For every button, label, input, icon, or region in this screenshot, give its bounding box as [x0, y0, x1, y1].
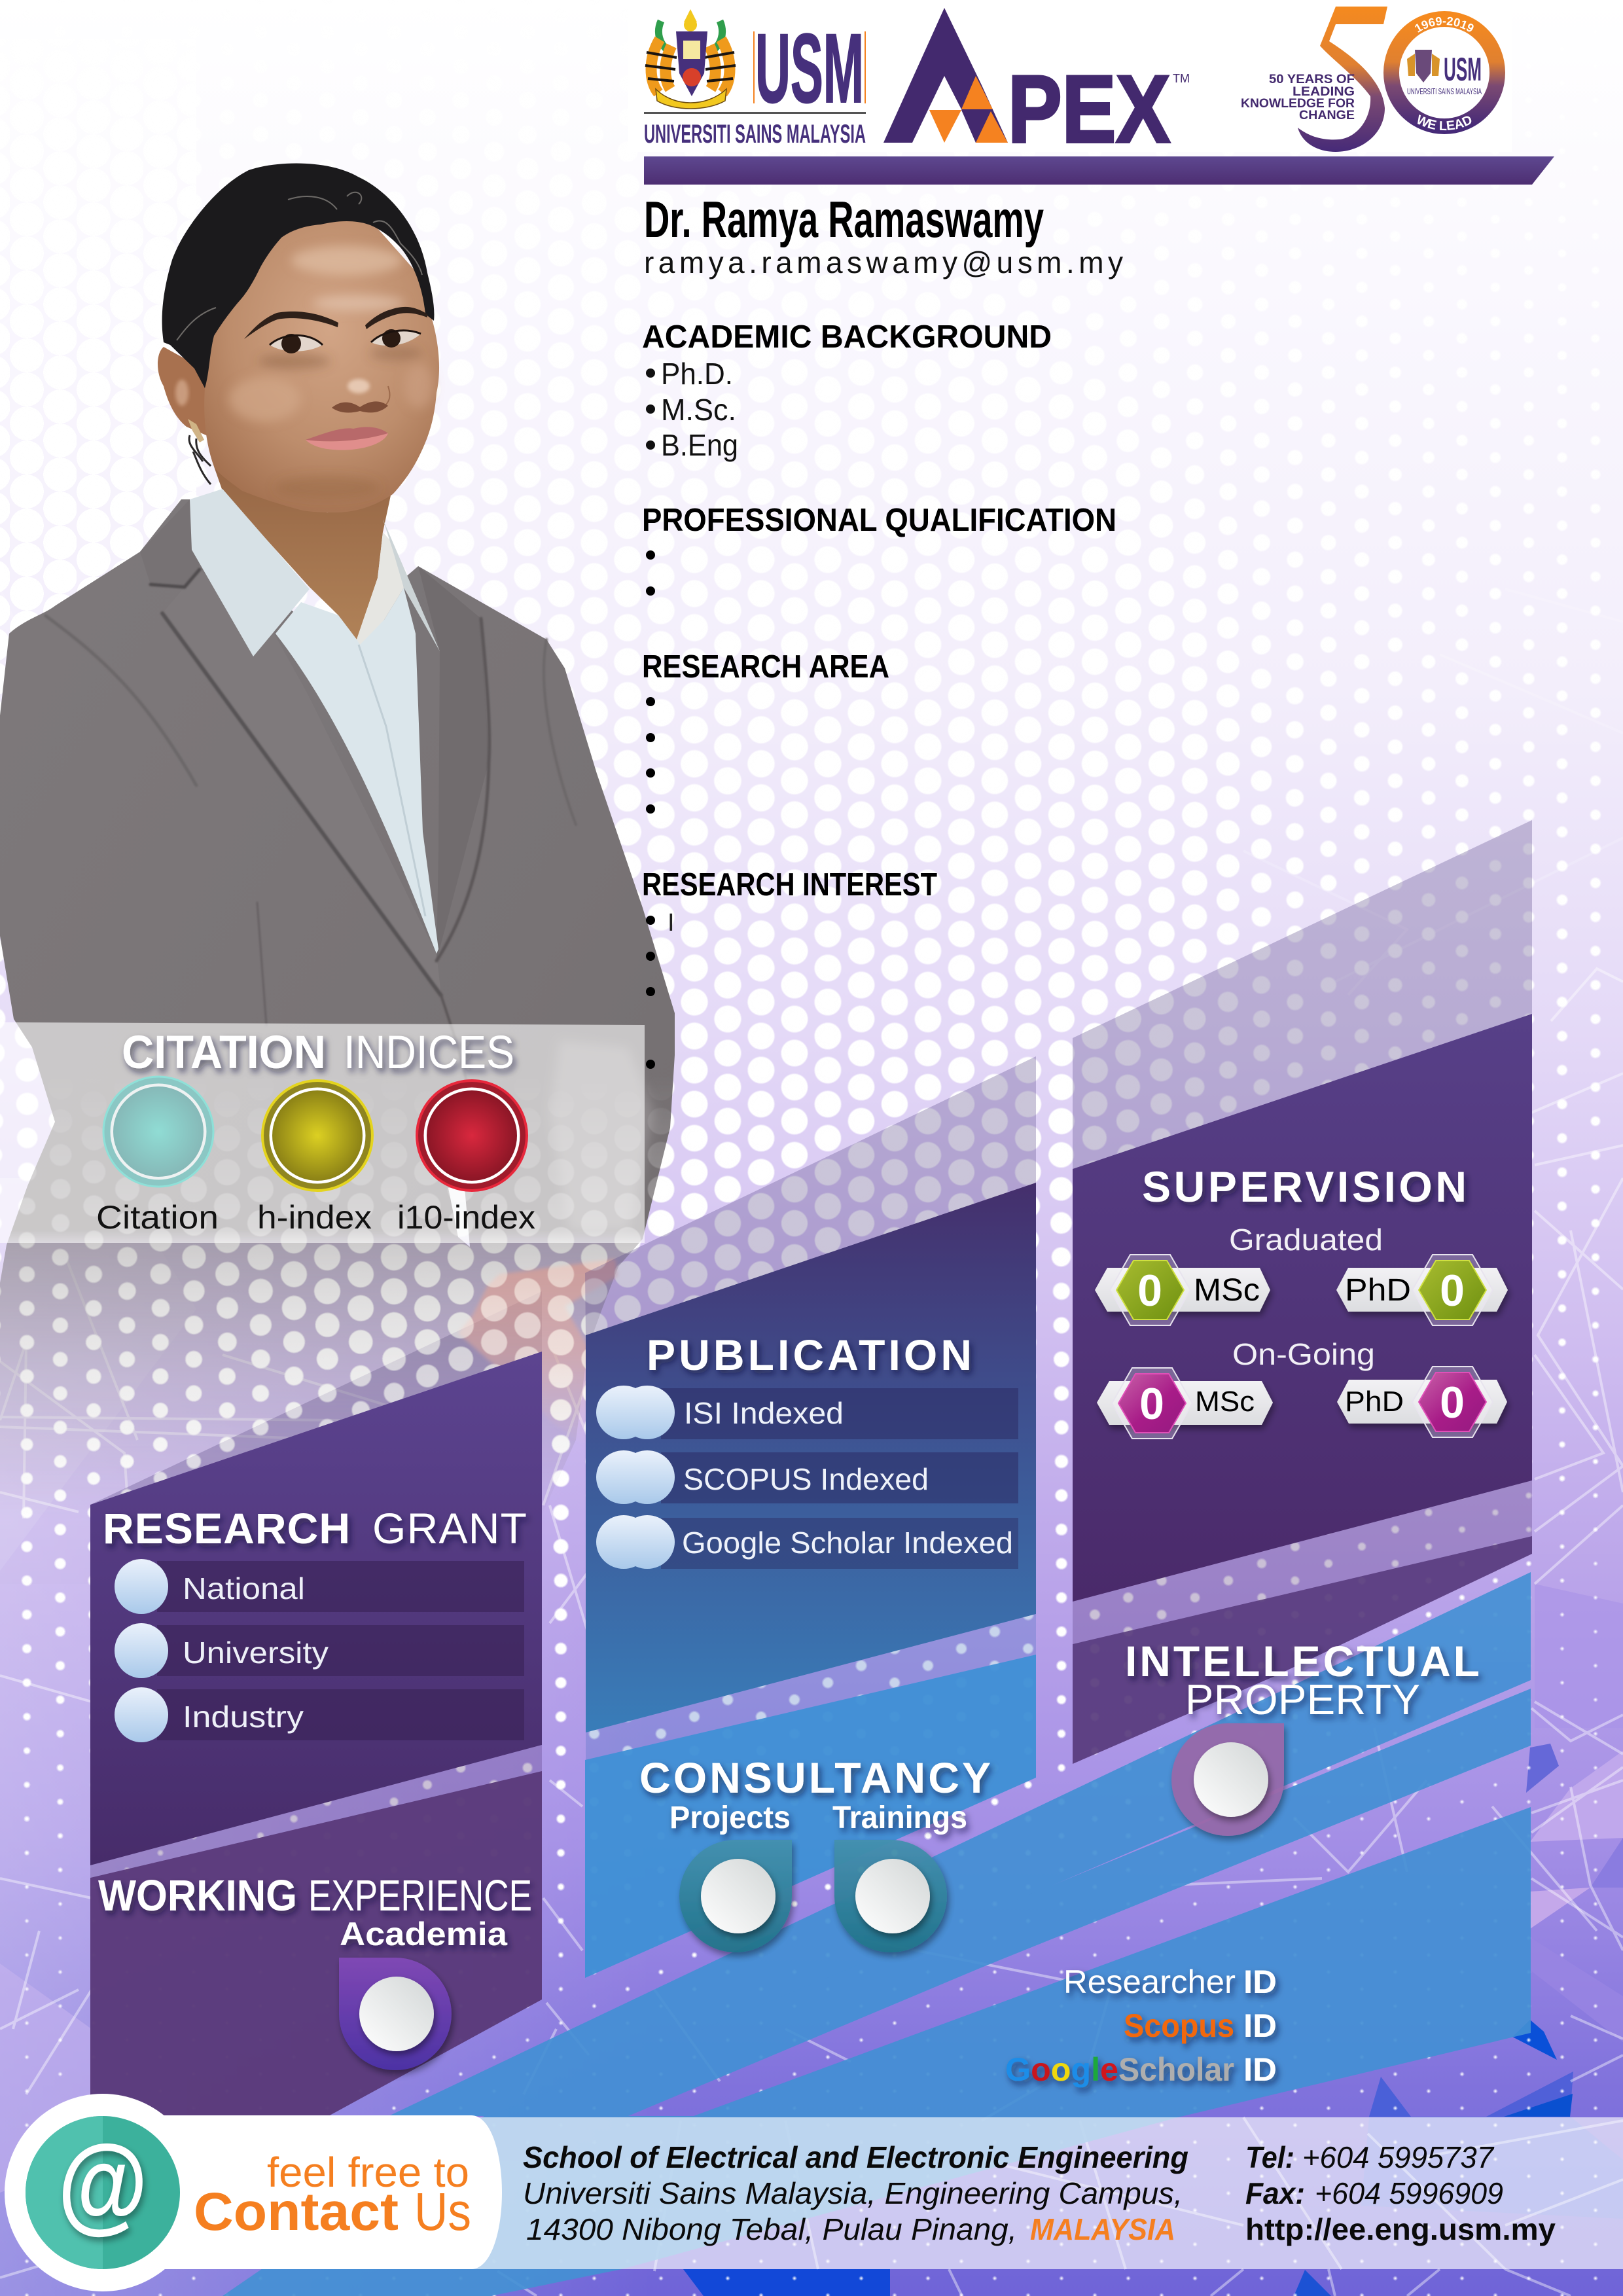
panel: working experience [90, 1771, 542, 2116]
header white backing [628, 0, 1512, 152]
footer contact details [1245, 2140, 1556, 2246]
contact text: feel free to [267, 2149, 469, 2196]
publication title: PUBLICATION [647, 1331, 972, 1379]
panel: citation indices [0, 1022, 645, 1243]
researcher ids [1005, 1964, 1277, 2088]
badge: graduated MSc: MSc [1194, 1273, 1260, 1308]
portrait: hair wisps at nape [189, 435, 211, 484]
ip title [1125, 1637, 1480, 1723]
citation title [122, 1027, 514, 1079]
row: Google Scholar [596, 1515, 1018, 1569]
badge: on-going PhD: PhD [1345, 1386, 1404, 1418]
white pill [131, 2115, 502, 2269]
google scholar id: Scholar [1118, 2051, 1234, 2088]
apex white inner [912, 76, 976, 143]
portrait: shirt [276, 588, 438, 954]
teal disc [26, 2116, 180, 2269]
citation badge teal [103, 1077, 213, 1187]
name: Dr. Ramya Ramaswamy [644, 190, 1044, 248]
footer address: MALAYSIA [1030, 2212, 1175, 2246]
portrait: blazer seams [46, 569, 576, 1139]
apex triangle A [883, 8, 1008, 143]
footer address: Universiti Sains Malaysia, Engineering Campus, [523, 2176, 1183, 2210]
portrait: left eye [270, 334, 323, 353]
graduated label: Graduated [1229, 1223, 1383, 1257]
ip title: INTELLECTUAL [1125, 1637, 1480, 1685]
footer contact details: Tel: [1245, 2140, 1294, 2174]
badge: graduated PhD: PhD [1345, 1273, 1411, 1308]
small USM: USM [1444, 51, 1482, 88]
researcher id: ID [1243, 1964, 1277, 2000]
panel: supervision [1073, 820, 1532, 1644]
footer address [523, 2140, 1188, 2246]
citation labels: i10-index [397, 1199, 535, 1236]
badge: graduated PhD: 0 [1440, 1266, 1465, 1316]
consultancy sublabels: Projects [669, 1801, 791, 1835]
panel: consultancy [585, 1655, 1036, 1978]
panel: publication [585, 1056, 1036, 1760]
background low-poly triangles [0, 982, 1623, 2296]
portrait: collar notch [140, 551, 141, 552]
small university name: UNIVERSITI SAINS MALAYSIA [1407, 86, 1482, 96]
icon: academia drop [339, 1958, 452, 2070]
ip drop icon [1171, 1723, 1284, 1836]
portrait: face highlights [229, 246, 433, 499]
portrait: shirt placket [359, 645, 425, 916]
portrait: back collar [357, 532, 404, 645]
badge: graduated MSc [1095, 1255, 1270, 1325]
row: SCOPUS [596, 1450, 1018, 1504]
portrait: lips [306, 427, 388, 450]
badge: on-going MSc: MSc [1195, 1386, 1255, 1418]
footer address: School of Electrical and Electronic Engineering [523, 2140, 1188, 2174]
apex orange lower right [976, 111, 1008, 143]
zero ring [1391, 19, 1497, 126]
research grant title: GRANT [372, 1504, 527, 1552]
badge: on-going PhD: 0 [1440, 1378, 1465, 1427]
academic list: B.Eng [661, 428, 738, 462]
portrait: grey hair strands [177, 192, 422, 340]
row: industry [115, 1687, 524, 1742]
icon: projects drop [679, 1840, 792, 1952]
five numeral [1298, 7, 1387, 152]
portrait: ear [158, 347, 211, 437]
portrait: left lapel [162, 569, 441, 996]
badge: on-going MSc: 0 [1139, 1379, 1164, 1429]
row: ISI [596, 1386, 1018, 1439]
citation title: CITATION [122, 1027, 326, 1079]
small crest [1407, 50, 1440, 82]
academic list: Ph.D. [661, 357, 733, 391]
USM letters: USM [755, 13, 864, 123]
slogan: LEADING [1293, 85, 1355, 99]
footer contact details: +604 5995737 [1302, 2140, 1494, 2174]
row: Google Scholar: Google Scholar Indexed [682, 1526, 1013, 1560]
row: university: University [183, 1636, 329, 1670]
contact text: Contact [194, 2182, 399, 2242]
email: ramya.ramaswamy@usm.my [644, 245, 1123, 279]
apex wordmark: PEX [1008, 56, 1170, 162]
logo: USM [644, 9, 866, 149]
footer contact details: http://ee.eng.usm.my [1245, 2212, 1556, 2246]
icon: USM crest [645, 9, 736, 109]
portrait: shirt tail [448, 1188, 470, 1247]
blue stripes [223, 1572, 1531, 2296]
consultancy title: CONSULTANCY [639, 1753, 991, 1802]
portrait: blazer [0, 499, 675, 1584]
panel: intellectual property [1073, 1536, 1532, 1836]
consultancy sublabels: Trainings [832, 1801, 967, 1835]
supervision title: SUPERVISION [1142, 1162, 1467, 1211]
portrait: nose [332, 379, 390, 413]
row: university [115, 1623, 524, 1678]
on-going label: On-Going [1232, 1337, 1375, 1371]
citation badge yellow [262, 1081, 372, 1191]
google scholar id [1005, 2051, 1277, 2088]
row: ISI: ISI Indexed [684, 1396, 844, 1430]
researcher id: Researcher [1063, 1964, 1236, 2000]
portrait: right brow [365, 307, 427, 329]
citation title: INDICES [344, 1027, 514, 1079]
panel: research grant back overlay [90, 1291, 542, 1505]
slogan: KNOWLEDGE FOR [1241, 97, 1355, 111]
working experience title [98, 1871, 532, 1920]
research interest [642, 867, 937, 1069]
trademark: TM [1173, 72, 1190, 85]
google scholar id: ID [1243, 2051, 1277, 2088]
working experience title: WORKING [98, 1871, 297, 1920]
professional qualification [642, 503, 1116, 596]
citation labels: h-index [257, 1199, 372, 1236]
portrait: right lapel [418, 566, 489, 961]
research grant title: RESEARCH [103, 1504, 350, 1552]
academic list: M.Sc. [661, 393, 736, 427]
badge: graduated MSc: 0 [1137, 1266, 1162, 1316]
research interest: RESEARCH INTEREST [642, 867, 937, 903]
contact text [194, 2149, 471, 2242]
ring years: 1969-2019 [1415, 17, 1474, 33]
portrait: hand [458, 1259, 618, 1446]
consultancy sublabels [669, 1801, 967, 1835]
portrait: neck [214, 467, 391, 639]
background left glow [0, 1178, 654, 2296]
icon: trainings drop [834, 1840, 947, 1952]
portrait: left brow [244, 312, 338, 339]
white disc [5, 2094, 201, 2291]
citation badge red [417, 1081, 527, 1191]
google scholar id: Google [1005, 2051, 1118, 2088]
apex orange lower left [929, 110, 961, 143]
working experience title: EXPERIENCE [308, 1871, 532, 1920]
footer contact details: Fax: [1245, 2176, 1305, 2210]
apex purple lower [961, 110, 993, 143]
ip title: PROPERTY [1185, 1676, 1420, 1723]
research interest: I [668, 909, 675, 937]
logo caption: UNIVERSITI SAINS MALAYSIA [644, 120, 866, 149]
ip value disc [1194, 1742, 1268, 1817]
academic background: ACADEMIC BACKGROUND [642, 319, 1052, 355]
row: SCOPUS: SCOPUS Indexed [683, 1462, 929, 1496]
apex orange top [961, 76, 993, 109]
research area: RESEARCH AREA [642, 649, 889, 685]
slogan [1241, 73, 1355, 122]
citation labels [96, 1199, 535, 1236]
badge: on-going PhD [1337, 1367, 1507, 1437]
ring caption: WE LEAD [1418, 115, 1471, 131]
badge: on-going MSc [1097, 1368, 1273, 1439]
footer address: 14300 Nibong Tebal, Pulau Pinang, [526, 2212, 1017, 2246]
row: national: National [183, 1571, 305, 1605]
logo: APEX [883, 8, 1190, 162]
academic list [646, 357, 738, 462]
panel: research grant [90, 1352, 542, 1878]
portrait: sleeve highlight [550, 1041, 654, 1230]
footer band [393, 2117, 1623, 2269]
academic background [642, 319, 1052, 462]
portrait: earring [188, 419, 204, 442]
row: industry: Industry [183, 1700, 304, 1734]
at sign: @ [58, 2123, 148, 2243]
portrait: hair [162, 164, 434, 388]
contact text: Us [414, 2182, 471, 2242]
academia label: Academia [340, 1916, 508, 1952]
badge: graduated PhD [1336, 1255, 1508, 1325]
portrait: head [158, 164, 439, 512]
professional qualification: PROFESSIONAL QUALIFICATION [642, 503, 1116, 538]
portrait [0, 467, 675, 1584]
portrait: right collar [383, 519, 440, 651]
slogan: 50 YEARS OF [1269, 73, 1355, 86]
footer contact details: +604 5996909 [1315, 2176, 1503, 2210]
portrait: left collar [190, 489, 310, 656]
slogan: CHANGE [1299, 109, 1355, 122]
citation labels: Citation [96, 1199, 219, 1236]
divider [644, 112, 866, 114]
logo: 50 years [1241, 7, 1505, 152]
research grant title [103, 1504, 527, 1552]
scopus id: ID [1243, 2007, 1277, 2044]
research area [642, 649, 889, 814]
contact badge [5, 2094, 502, 2291]
portrait: face [196, 216, 439, 512]
row: national [115, 1559, 524, 1614]
header bar [644, 156, 1554, 185]
scopus id: Scopus [1124, 2007, 1234, 2044]
portrait: right eye [371, 329, 421, 348]
